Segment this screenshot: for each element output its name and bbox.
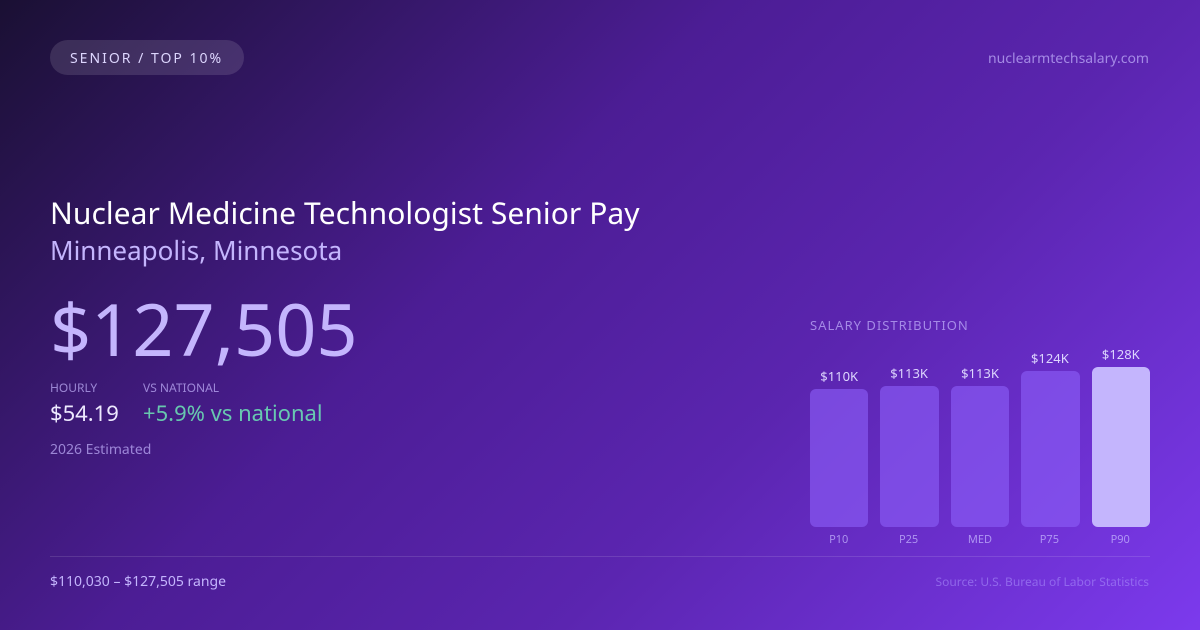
label P10: P10 (829, 532, 848, 547)
subtitle: location: Minneapolis, Minnesota (50, 232, 342, 268)
label P90: P90 (1111, 532, 1130, 547)
bar P25 (880, 386, 939, 527)
badge: senior / top 10%: SENIOR / TOP 10% (70, 49, 223, 68)
bar P75 (1021, 371, 1080, 527)
stat: hourly (50, 379, 119, 428)
value P75: $124K (1031, 349, 1069, 367)
value P25: $113K (890, 364, 928, 382)
label median: MED (968, 532, 992, 547)
vs national value: +5.9% vs national (143, 398, 323, 428)
value P90: $128K (1102, 345, 1140, 363)
title: Nuclear Medicine Technologist Senior Pay (50, 192, 640, 233)
stat: vs national (143, 379, 323, 428)
hourly value: $54.19 (50, 398, 119, 428)
source: Source: U.S. Bureau of Labor Statistics (936, 573, 1149, 590)
vs national label: VS NATIONAL (143, 379, 219, 396)
label P25: P25 (899, 532, 918, 547)
salary range: $110,030 – $127,505 range (50, 572, 226, 591)
estimate note: 2026 Estimated (50, 440, 151, 459)
value P10: $110K (820, 367, 858, 385)
bar median (951, 386, 1009, 527)
site url: nuclearmtechsalary.com (988, 49, 1149, 68)
hourly label: HOURLY (50, 379, 97, 396)
badge: senior / top 10% (50, 40, 244, 75)
bar P90 (1092, 367, 1150, 527)
value median: $113K (961, 364, 999, 382)
headline salary: $127,505 (50, 280, 358, 378)
bar P10 (810, 389, 868, 527)
chart heading: SALARY DISTRIBUTION (810, 316, 969, 334)
label P75: P75 (1040, 532, 1059, 547)
